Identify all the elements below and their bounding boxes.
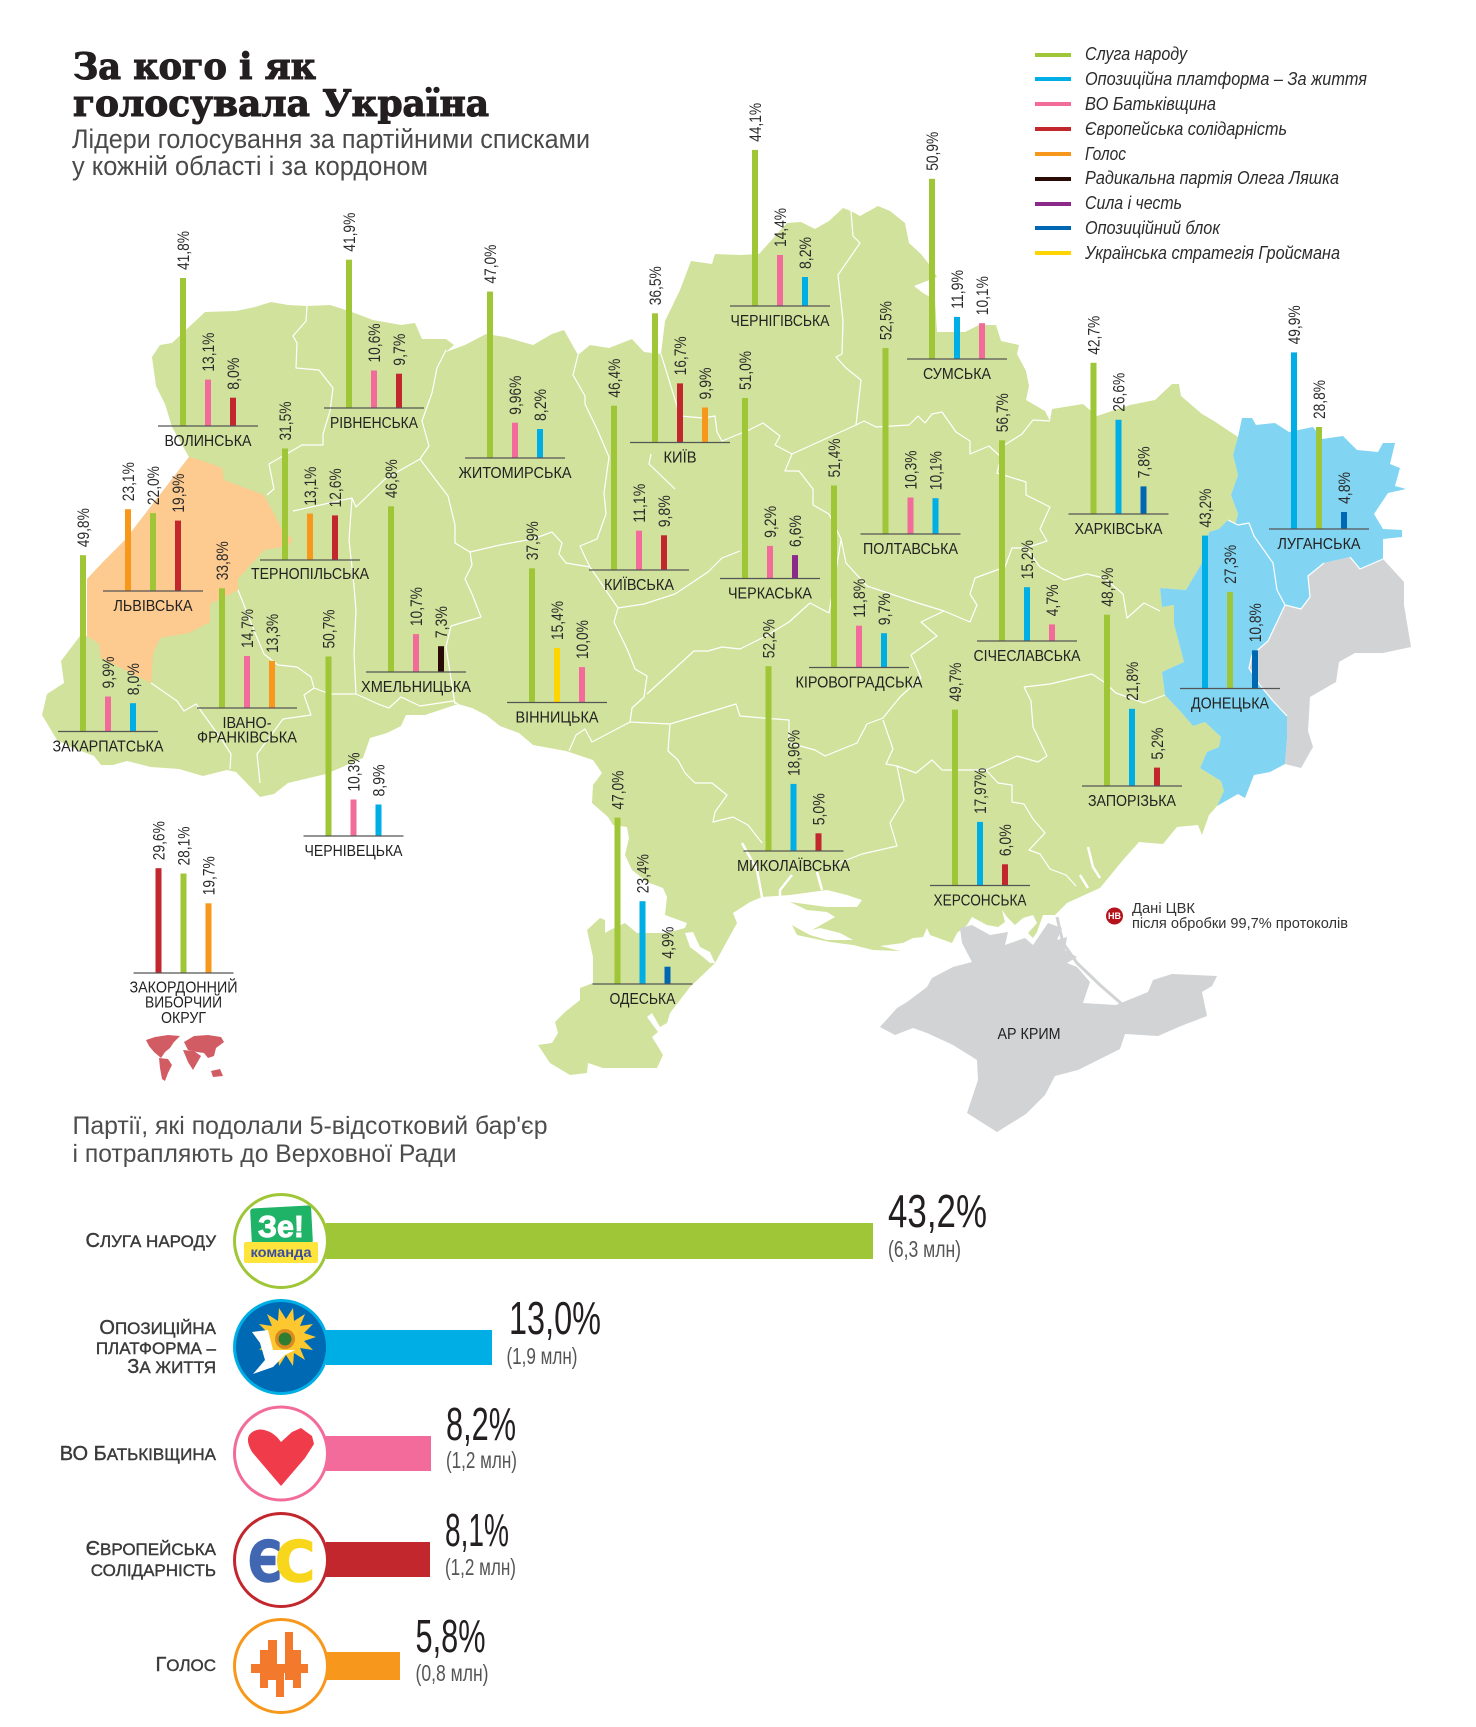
chart: Закордонний виборчий округ: ВИБОРЧИЙ bbox=[145, 994, 222, 1012]
chart: Закордонний виборчий округ: 28,1% bbox=[174, 826, 194, 866]
legend: Європейська солідарність bbox=[1085, 119, 1287, 139]
party row: Європейська солідарність: Є bbox=[248, 1530, 282, 1595]
chart: Кіровоградська: 9,7% bbox=[875, 593, 894, 625]
chart: Івано-Франківська: ФРАНКІВСЬКА bbox=[197, 730, 298, 746]
chart: Кіровоградська bbox=[796, 438, 923, 692]
party row: Голос: 5,8% bbox=[416, 1610, 486, 1662]
chart: Закордонний виборчий округ: ОКРУГ bbox=[161, 1010, 207, 1027]
chart: Луганська bbox=[1269, 305, 1369, 553]
chart: Чернівецька bbox=[304, 610, 404, 860]
chart: Харківська: 7,8% bbox=[1134, 446, 1154, 478]
chart: Київська: 9,8% bbox=[655, 495, 674, 527]
chart: Івано-Франківська: ІВАНО- bbox=[222, 715, 272, 732]
chart: Тернопільська bbox=[251, 402, 370, 583]
chart: Одеська bbox=[592, 771, 692, 1008]
Arabat spit bbox=[1057, 917, 1123, 1005]
legend: Слуга народу bbox=[1085, 44, 1188, 64]
chart: Рівненська: РІВНЕНСЬКА bbox=[330, 415, 419, 432]
party row: Слуга народу: команда bbox=[250, 1244, 312, 1260]
chart: Київ: 16,7% bbox=[671, 336, 690, 375]
chart: Житомирська: 8,2% bbox=[531, 389, 550, 421]
party row: Слуга народу: (6,3 млн) bbox=[888, 1236, 961, 1262]
source note: після обробки 99,7% протоколів bbox=[1132, 915, 1348, 932]
party row: Слуга народу: 43,2% bbox=[888, 1185, 987, 1237]
chart: Хмельницька: 10,7% bbox=[407, 587, 426, 626]
party row: Слуга народу: Зе! bbox=[258, 1209, 304, 1244]
chart: Миколаївська: МИКОЛАЇВСЬКА bbox=[737, 858, 851, 875]
chart: Хмельницька: 7,3% bbox=[432, 606, 451, 638]
legend: Радикальна партія Олега Ляшка bbox=[1085, 168, 1339, 188]
chart: Вінницька: 10,0% bbox=[573, 620, 592, 659]
chart: Черкаська: 9,2% bbox=[761, 506, 780, 538]
subtitle bbox=[72, 124, 590, 181]
chart: Тернопільська: 13,1% bbox=[301, 467, 320, 506]
chart: Кіровоградська: КІРОВОГРАДСЬКА bbox=[796, 674, 923, 692]
party row: Опозиційна платформа: (1,9 млн) bbox=[506, 1343, 578, 1369]
chart: Херсонська: ХЕРСОНСЬКА bbox=[934, 892, 1027, 910]
party row: Європейська солідарність: ЄВРОПЕЙСЬКА bbox=[86, 1538, 217, 1560]
chart: Київська: КИЇВСЬКА bbox=[604, 577, 675, 594]
chart: Донецька: 43,2% bbox=[1196, 489, 1215, 528]
label: AR Crimea: АР КРИМ bbox=[998, 1026, 1060, 1043]
chart: Рівненська: 9,7% bbox=[390, 334, 409, 366]
chart: Житомирська bbox=[458, 245, 572, 482]
heading: parties over the barrier: і потрапляють до Верховної Ради bbox=[72, 1140, 456, 1168]
chart: Кіровоградська: 51,4% bbox=[825, 438, 844, 478]
chart: Житомирська: ЖИТОМИРСЬКА bbox=[458, 465, 572, 482]
chart: Запорізька bbox=[1082, 568, 1182, 810]
chart: Чернігівська bbox=[730, 103, 830, 330]
chart: Закордонний виборчий округ: 19,7% bbox=[200, 856, 218, 895]
chart: Хмельницька bbox=[361, 459, 472, 696]
chart: Закордонний виборчий округ bbox=[130, 821, 238, 1027]
chart: Луганська: 49,9% bbox=[1285, 305, 1304, 344]
chart: Полтавська: 10,3% bbox=[902, 450, 920, 490]
chart: Харківська: 26,6% bbox=[1110, 373, 1128, 412]
legend: ВО Батьківщина bbox=[1085, 94, 1216, 114]
chart: Полтавська: 52,5% bbox=[876, 301, 896, 340]
party row: Слуга народу: СЛУГА НАРОДУ bbox=[86, 1230, 216, 1252]
subtitle: у кожній області і за кордоном bbox=[72, 151, 428, 181]
chart: Вінницька: ВІННИЦЬКА bbox=[516, 710, 599, 726]
chart: Волинська: 13,1% bbox=[199, 333, 218, 372]
chart: Січеславська: 56,7% bbox=[993, 393, 1012, 432]
chart: Волинська: ВОЛИНСЬКА bbox=[164, 433, 252, 450]
chart: Херсонська bbox=[930, 663, 1030, 910]
chart: Запорізька: 48,4% bbox=[1098, 568, 1117, 607]
chart: Чернігівська: 14,4% bbox=[771, 208, 790, 247]
legend: Опозиційна платформа – За життя bbox=[1085, 69, 1367, 89]
party row: Європейська солідарність: С bbox=[275, 1530, 315, 1595]
party row: ВО Батьківщина bbox=[60, 1398, 517, 1500]
chart: Київ bbox=[630, 266, 730, 466]
party row: Опозиційна платформа: ПЛАТФОРМА – bbox=[96, 1339, 217, 1358]
chart: Херсонська: 6,0% bbox=[996, 824, 1015, 856]
party row: Європейська солідарність: (1,2 млн) bbox=[445, 1554, 516, 1580]
chart: Луганська: 28,8% bbox=[1310, 380, 1329, 419]
chart: Черкаська: 51,0% bbox=[736, 351, 755, 390]
chart: Донецька: ДОНЕЦЬКА bbox=[1191, 696, 1270, 712]
chart: Херсонська: 17,97% bbox=[971, 768, 990, 814]
party row: Голос: ГОЛОС bbox=[155, 1654, 216, 1676]
chart: Тернопільська: ТЕРНОПІЛЬСЬКА bbox=[251, 566, 370, 583]
chart: Одеська: ОДЕСЬКА bbox=[610, 991, 676, 1008]
party row: Опозиційна платформа: ЗА ЖИТТЯ bbox=[127, 1356, 216, 1378]
chart: Черкаська: ЧЕРКАСЬКА bbox=[728, 586, 813, 602]
chart: Миколаївська: 52,2% bbox=[760, 619, 778, 658]
region: Lviv highlighted bbox=[87, 457, 293, 683]
chart: Запорізька: 5,2% bbox=[1148, 728, 1167, 760]
legend: Голос bbox=[1085, 144, 1126, 164]
chart: Донецька bbox=[1180, 489, 1280, 712]
chart: Вінницька: 37,9% bbox=[523, 521, 542, 560]
chart: Харківська: ХАРКІВСЬКА bbox=[1074, 521, 1163, 538]
heading: parties over the barrier: Партії, які подолали 5-відсотковий бар'єр bbox=[72, 1112, 548, 1140]
chart: Миколаївська: 18,96% bbox=[784, 730, 804, 776]
chart: Закарпатська bbox=[52, 508, 164, 756]
chart: Одеська: 23,4% bbox=[634, 854, 652, 893]
chart: Закарпатська: 8,0% bbox=[124, 663, 143, 695]
icon: world map bbox=[146, 1035, 224, 1081]
chart: Сумська bbox=[907, 132, 1007, 383]
title bbox=[73, 46, 489, 125]
chart: Волинська bbox=[158, 231, 258, 450]
region: Crimea bbox=[880, 923, 1217, 1132]
party row: Опозиційна платформа: 13,0% bbox=[509, 1292, 601, 1344]
river inlets bbox=[742, 843, 1100, 898]
chart: Волинська: 8,0% bbox=[224, 358, 243, 390]
party row: ВО Батьківщина: (1,2 млн) bbox=[446, 1447, 517, 1473]
party row: Голос bbox=[155, 1610, 488, 1712]
chart: Запорізька: 21,8% bbox=[1123, 662, 1142, 701]
chart: Чернівецька: ЧЕРНІВЕЦЬКА bbox=[304, 843, 403, 860]
chart: Чернівецька: 10,3% bbox=[344, 752, 364, 792]
oblast borders bbox=[151, 211, 1383, 886]
chart: Вінницька bbox=[507, 521, 607, 726]
chart: Тернопільська: 12,6% bbox=[326, 468, 345, 507]
chart: Івано-Франківська: 33,8% bbox=[213, 541, 232, 580]
lagoon bbox=[685, 932, 715, 963]
party row: ВО Батьківщина: ВО БАТЬКІВЩИНА bbox=[60, 1443, 217, 1465]
party row: Голос: (0,8 млн) bbox=[416, 1660, 488, 1686]
party row: Європейська солідарність: 8,1% bbox=[445, 1504, 509, 1556]
heading: parties over the barrier bbox=[72, 1112, 548, 1168]
chart: Житомирська: 9,96% bbox=[506, 376, 525, 415]
chart: Сумська: 50,9% bbox=[923, 132, 942, 171]
chart: Івано-Франківська bbox=[197, 541, 298, 746]
chart: Закарпатська: 49,8% bbox=[74, 508, 93, 547]
chart: Луганська: 4,8% bbox=[1335, 472, 1354, 504]
chart: Херсонська: 49,7% bbox=[946, 663, 965, 702]
chart: Чернігівська: ЧЕРНІГІВСЬКА bbox=[730, 313, 830, 330]
legend: Українська стратегія Гройсмана bbox=[1084, 243, 1340, 263]
chart: Львівська: 22,0% bbox=[144, 466, 163, 505]
source note bbox=[1106, 900, 1348, 932]
chart: Черкаська bbox=[720, 351, 820, 602]
chart: Закарпатська: 9,9% bbox=[99, 656, 118, 688]
chart: Івано-Франківська: 13,3% bbox=[263, 614, 282, 653]
chart: Миколаївська: 5,0% bbox=[810, 793, 828, 825]
party row: Слуга народу bbox=[86, 1185, 987, 1288]
chart: Січеславська: 15,2% bbox=[1018, 540, 1037, 579]
chart: Миколаївська bbox=[737, 619, 851, 875]
chart: Черкаська: 6,6% bbox=[786, 515, 805, 547]
chart: Січеславська: СІЧЕСЛАВСЬКА bbox=[974, 648, 1081, 665]
legend bbox=[1035, 44, 1367, 263]
chart: Січеславська bbox=[974, 393, 1081, 665]
chart: Львівська: ЛЬВІВСЬКА bbox=[114, 598, 193, 615]
chart: Сумська: СУМСЬКА bbox=[923, 366, 992, 383]
chart: Вінницька: 15,4% bbox=[548, 601, 567, 640]
chart: Чернівецька: 50,7% bbox=[320, 610, 338, 648]
chart: Чернігівська: 44,1% bbox=[746, 103, 765, 142]
chart: Харківська bbox=[1068, 316, 1168, 538]
subtitle: Лідери голосування за партійними списками bbox=[72, 124, 590, 154]
chart: Запорізька: ЗАПОРІЗЬКА bbox=[1088, 793, 1177, 810]
legend: Сила і честь bbox=[1085, 193, 1182, 213]
chart: Хмельницька: 46,8% bbox=[382, 459, 401, 498]
title: голосувала Україна bbox=[73, 83, 489, 125]
chart: Львівська: 23,1% bbox=[119, 462, 138, 501]
party row: ВО Батьківщина: 8,2% bbox=[446, 1398, 516, 1450]
chart: Київ: КИЇВ bbox=[664, 450, 696, 466]
region: Luhansk highlighted bbox=[1228, 418, 1406, 609]
chart: Житомирська: 47,0% bbox=[481, 245, 500, 284]
party row: Опозиційна платформа: ОПОЗИЦІЙНА bbox=[99, 1317, 217, 1339]
title: За кого і як bbox=[73, 46, 316, 88]
chart: Луганська: ЛУГАНСЬКА bbox=[1278, 536, 1361, 553]
chart: Сумська: 10,1% bbox=[973, 276, 992, 315]
chart: Волинська: 41,8% bbox=[174, 231, 193, 270]
party row: Європейська солідарність: СОЛІДАРНІСТЬ bbox=[91, 1561, 216, 1580]
legend: Опозиційний блок bbox=[1085, 218, 1221, 238]
chart: Чернігівська: 8,2% bbox=[796, 237, 815, 269]
chart: Донецька: 10,8% bbox=[1246, 603, 1265, 642]
chart: Закарпатська: ЗАКАРПАТСЬКА bbox=[52, 738, 164, 756]
chart: Київська bbox=[589, 359, 689, 594]
chart: Сумська: 11,9% bbox=[948, 270, 967, 309]
chart: Донецька: 27,3% bbox=[1221, 545, 1240, 584]
source note: НВ bbox=[1108, 911, 1121, 921]
chart: Тернопільська: 31,5% bbox=[276, 402, 295, 440]
chart: Рівненська: 10,6% bbox=[365, 324, 384, 362]
chart: Івано-Франківська: 14,7% bbox=[238, 609, 257, 648]
chart: Закордонний виборчий округ: 29,6% bbox=[150, 821, 168, 860]
chart: Хмельницька: ХМЕЛЬНИЦЬКА bbox=[361, 679, 472, 696]
chart: Київ: 9,9% bbox=[696, 368, 715, 400]
source note: Дані ЦВК bbox=[1132, 900, 1195, 917]
chart: Чернівецька: 8,9% bbox=[370, 764, 388, 796]
region: main territory bbox=[42, 206, 1238, 1075]
chart: Рівненська bbox=[324, 213, 424, 432]
region: occupied territories bbox=[1249, 557, 1411, 768]
region: Donetsk highlighted bbox=[1160, 520, 1287, 806]
chart: Полтавська: ПОЛТАВСЬКА bbox=[863, 541, 959, 558]
party row: Європейська солідарність bbox=[86, 1504, 516, 1606]
chart: Київська: 46,4% bbox=[605, 359, 624, 398]
chart: Рівненська: 41,9% bbox=[340, 213, 359, 252]
chart: Кіровоградська: 11,8% bbox=[850, 579, 869, 618]
chart: Одеська: 4,9% bbox=[658, 927, 678, 959]
chart: Київська: 11,1% bbox=[630, 484, 649, 523]
chart: Закордонний виборчий округ: ЗАКОРДОННИЙ bbox=[130, 978, 238, 996]
chart: Полтавська bbox=[860, 301, 960, 558]
chart: Одеська: 47,0% bbox=[608, 771, 628, 810]
party row: Опозиційна платформа bbox=[96, 1292, 601, 1394]
chart: Полтавська: 10,1% bbox=[926, 451, 946, 490]
chart: Львівська bbox=[103, 462, 203, 615]
chart: Київ: 36,5% bbox=[646, 266, 665, 305]
chart: Львівська: 19,9% bbox=[169, 474, 188, 513]
chart: Харківська: 42,7% bbox=[1084, 316, 1104, 355]
map of Ukraine bbox=[42, 206, 1411, 1132]
chart: Січеславська: 4,7% bbox=[1043, 584, 1062, 616]
